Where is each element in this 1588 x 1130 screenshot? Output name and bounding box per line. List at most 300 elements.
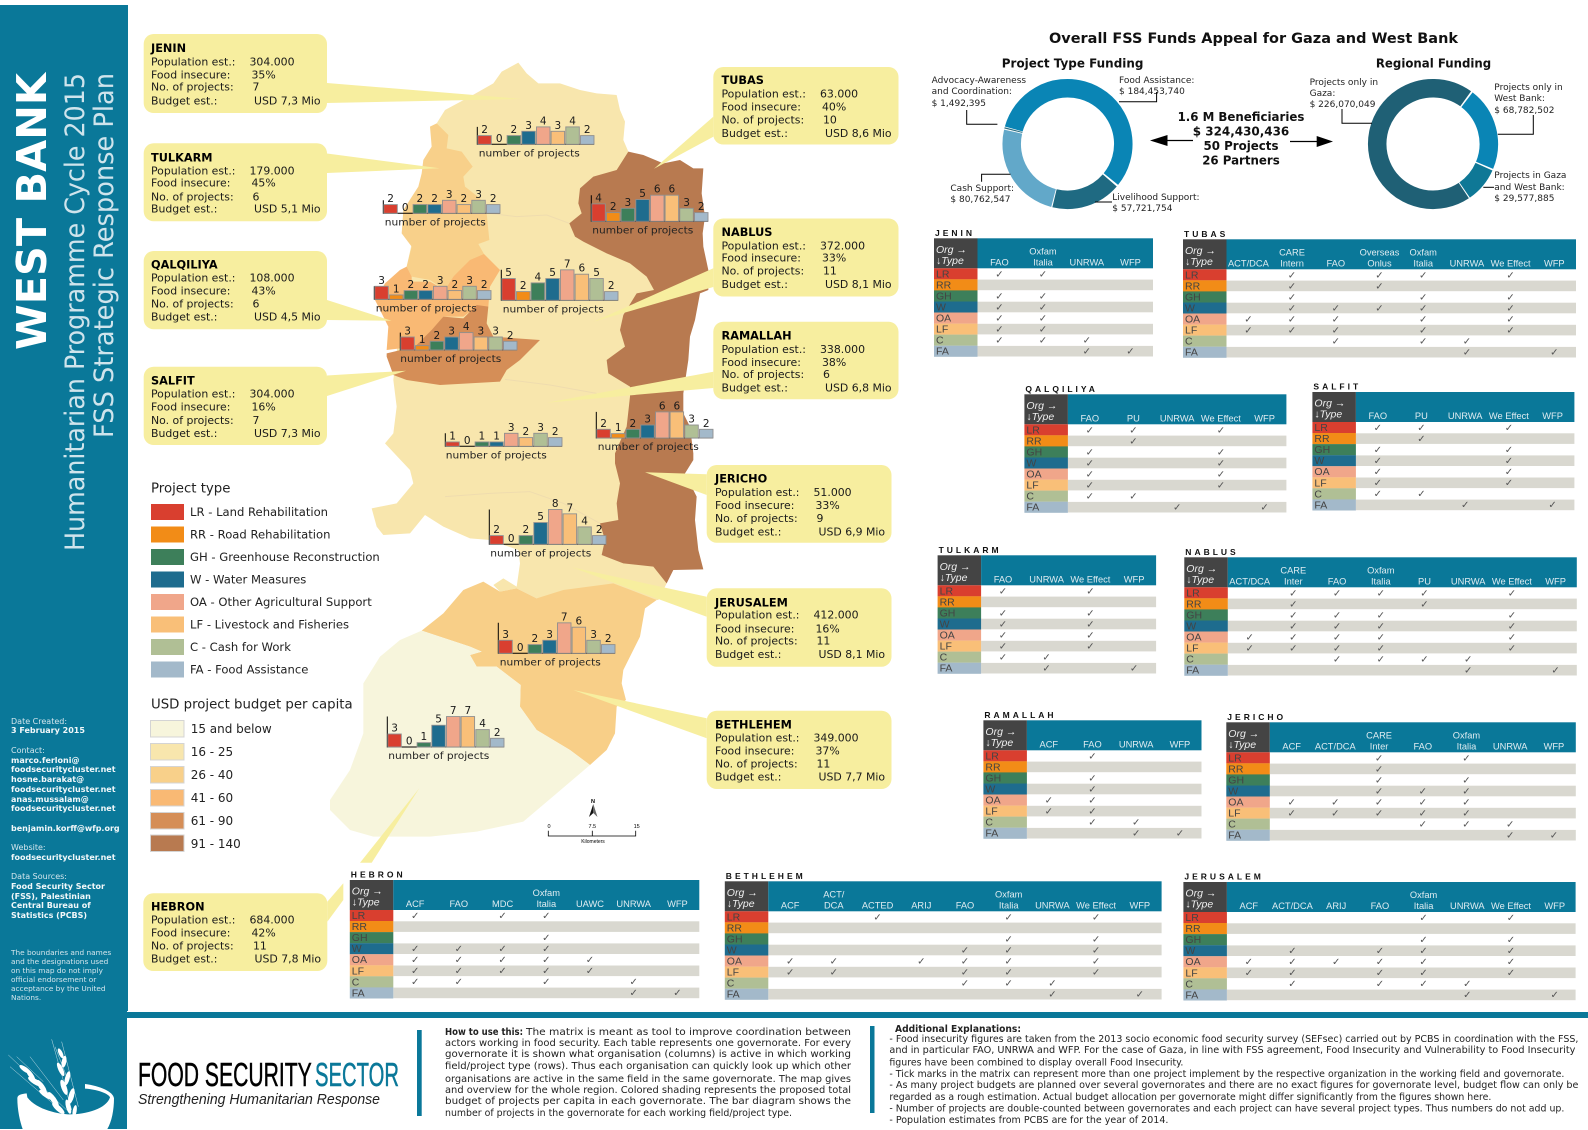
matrix table: Hebron: ACF xyxy=(406,899,425,909)
bar chart: Ramallah: number of projects xyxy=(446,450,547,461)
matrix table: Jenin: Org → xyxy=(936,244,967,256)
matrix table: Salfit: W xyxy=(1314,455,1324,467)
text block: how to use this: field/project type (rows). Thus each organisation can quickly look up which other xyxy=(445,1061,852,1072)
matrix table: Jericho: OA xyxy=(1228,796,1243,808)
matrix table: Salfit: LR xyxy=(1314,422,1328,434)
region: Tulkarm xyxy=(402,123,489,290)
matrix table: Bethlehem: GH xyxy=(727,933,743,945)
matrix table: Bethlehem: OA xyxy=(727,955,742,967)
matrix table: Bethlehem: Oxfam xyxy=(995,889,1023,899)
bar chart: Tulkarm: 20223232 xyxy=(387,189,497,214)
text block: additional explanations: regarded as a rough estimation. Actual budget allocation per governorate might differ significantly from the figures shown here. xyxy=(889,1092,1491,1103)
callout: Hebron: HEBRON xyxy=(151,900,205,913)
matrix table: Tulkarm: C xyxy=(940,652,948,664)
labels: project type funding: $ 80,762,547 xyxy=(950,195,1011,205)
matrix table: Jenin: FAO xyxy=(990,257,1009,267)
callout: Bethlehem xyxy=(573,690,892,789)
center statistics: 1.6 M Beneficiaries xyxy=(1178,110,1304,124)
bar chart: Bethlehem: 30237632 xyxy=(502,611,612,654)
matrix table: Tubas: ↓Type xyxy=(1185,256,1213,268)
legend heading: Project type xyxy=(151,482,230,496)
matrix table: Tubas: We Effect xyxy=(1491,258,1531,268)
region: Hebron xyxy=(330,631,590,837)
matrix table: Jericho: LF xyxy=(1228,808,1241,820)
matrix table: Bethlehem: FAO xyxy=(956,900,974,910)
matrix table: Nablus: ACT/DCA xyxy=(1229,576,1271,586)
matrix table: Tubas: ✓✓✓✓ xyxy=(1288,270,1515,281)
callout: Jericho: Food insecure: xyxy=(715,499,794,512)
matrix table: Jericho: RR xyxy=(1228,763,1244,775)
callout: Qalqiliya: No. of projects: xyxy=(151,297,234,310)
matrix table: Jericho: UNRWA xyxy=(1493,741,1528,751)
matrix table: Bethlehem: LF xyxy=(727,967,739,979)
matrix table: Bethlehem: We Effect xyxy=(1076,900,1116,910)
matrix table: Jericho: Inter xyxy=(1370,741,1388,751)
callout: Jerusalem: 16% xyxy=(816,622,840,635)
matrix table: Tubas: ✓✓ xyxy=(1463,347,1558,358)
text block: how to use this: The matrix is meant as tool to improve coordination between xyxy=(525,1027,851,1038)
matrix table: Tubas: ✓✓ xyxy=(1288,281,1384,292)
matrix table: Jericho: ✓✓✓ xyxy=(1375,786,1471,797)
matrix table: Bethlehem: ✓✓✓ xyxy=(961,978,1057,989)
legend: budget per capita: 91 - 140 xyxy=(191,837,241,851)
callout: Bethlehem: Population est.: xyxy=(715,731,799,744)
matrix table: Ramallah: ACF xyxy=(1039,739,1058,749)
matrix table: Tulkarm: ✓✓ xyxy=(999,608,1095,619)
matrix table: Jerusalem: FAO xyxy=(1371,901,1389,911)
matrix table: Jerusalem: ACT/DCA xyxy=(1272,901,1314,911)
matrix table: Tubas: ✓✓✓ xyxy=(1288,292,1515,303)
matrix table: Hebron: Org → xyxy=(352,886,383,898)
matrix table: Tulkarm: GH xyxy=(940,607,955,619)
sidebar credits text: anas.mussalam@ xyxy=(11,795,89,804)
heading: project type funding: Project Type Funding xyxy=(1002,56,1143,70)
matrix table: Ramallah: WFP xyxy=(1170,739,1190,749)
matrix table: Tubas: Intern xyxy=(1280,258,1304,268)
callout: Jenin: 7 xyxy=(252,80,259,93)
callout: Nablus: USD 8,1 Mio xyxy=(825,278,892,291)
legend heading: USD project budget per capita xyxy=(151,698,353,712)
matrix table: Qalqiliya: GH xyxy=(1026,446,1042,458)
main title: West Bank: WEST BANK xyxy=(8,71,56,350)
callout: Ramallah: USD 6,8 Mio xyxy=(825,381,892,394)
matrix table: Tubas: CARE xyxy=(1279,247,1305,257)
text block: additional explanations: Additional Explanations: xyxy=(895,1024,1021,1035)
matrix table: Jenin: ✓✓ xyxy=(995,313,1047,324)
matrix table: Nablus: W xyxy=(1186,620,1196,632)
matrix table: Nablus: Oxfam xyxy=(1367,565,1395,575)
matrix table: Jericho: ✓✓✓✓✓ xyxy=(1288,797,1471,808)
callout: Salfit: SALFIT xyxy=(151,374,195,387)
matrix table: Jenin: Oxfam xyxy=(1029,246,1057,256)
callout: Tubas xyxy=(654,67,898,169)
matrix table: Jerusalem: WFP xyxy=(1544,901,1565,911)
matrix table: Hebron: HEBRON xyxy=(351,870,406,880)
matrix table: Hebron: WFP xyxy=(667,899,688,909)
callout: Tulkarm: Food insecure: xyxy=(151,176,230,189)
callout: Ramallah: 338.000 xyxy=(820,343,865,356)
labels: project type funding: Food Assistance: xyxy=(1119,76,1194,86)
matrix table: Salfit: SALFIT xyxy=(1313,382,1361,392)
matrix table: Bethlehem: BETHLEHEM xyxy=(726,871,806,881)
matrix table: Tubas: LF xyxy=(1185,325,1197,337)
bar chart: Qalqiliya: number of projects xyxy=(376,303,477,314)
matrix table: Hebron: W xyxy=(352,943,362,955)
bar chart: Salfit: number of projects xyxy=(400,354,501,365)
labels: regional funding: $ 226,070,049 xyxy=(1310,100,1376,110)
callout: Jerusalem: Population est.: xyxy=(715,608,799,621)
callout: Nablus: Food insecure: xyxy=(722,252,801,265)
matrix table: Jericho: WFP xyxy=(1544,741,1564,751)
callout: Tulkarm: TULKARM xyxy=(151,151,213,164)
matrix table: Qalqiliya: ↓Type xyxy=(1026,411,1054,423)
matrix table: Ramallah: LR xyxy=(985,750,999,762)
labels: project type funding xyxy=(932,76,1200,214)
matrix table: Jerusalem: JERUSALEM xyxy=(1184,872,1264,882)
matrix table: Salfit: Org → xyxy=(1314,398,1345,410)
matrix table: Nablus: ↓Type xyxy=(1186,574,1214,586)
matrix table: Bethlehem: ✓✓✓ xyxy=(873,912,1100,923)
matrix table: Salfit xyxy=(1312,382,1574,511)
callout: Nablus: 372.000 xyxy=(820,239,865,252)
callout: Nablus xyxy=(593,218,898,322)
legend: project type: C - Cash for Work xyxy=(190,640,291,654)
matrix table: Tulkarm: ↓Type xyxy=(940,572,968,584)
labels: regional funding: and West Bank: xyxy=(1494,183,1565,193)
matrix table: Jerusalem: ✓✓✓✓✓ xyxy=(1245,968,1515,979)
matrix table: Qalqiliya: FA xyxy=(1026,502,1039,514)
callout: Tubas: TUBAS xyxy=(722,74,764,87)
callout: Salfit: 16% xyxy=(252,401,276,414)
bar chart: Qalqiliya: 31223232 xyxy=(378,275,488,295)
matrix table: Bethlehem: Italia xyxy=(999,900,1019,910)
legend: project type xyxy=(151,482,380,678)
sidebar credits text: 3 February 2015 xyxy=(11,726,85,735)
matrix table: Ramallah: ✓✓ xyxy=(1088,817,1140,828)
matrix table: Jericho: Oxfam xyxy=(1453,730,1480,740)
matrix table: Ramallah: ✓✓ xyxy=(1045,795,1097,806)
matrix table: Jericho: ✓✓ xyxy=(1375,753,1471,764)
matrix table: Ramallah: UNRWA xyxy=(1119,739,1154,749)
region: Bethlehem xyxy=(422,582,657,765)
matrix table: Jenin: LR xyxy=(936,268,950,280)
matrix table: Nablus: PU xyxy=(1418,576,1431,586)
callout: Jericho: No. of projects: xyxy=(715,512,798,525)
subtitle: programme cycle: Humanitarian Programme Cycle 2015 xyxy=(60,73,91,551)
matrix table: Ramallah: LF xyxy=(985,806,998,818)
matrix table: Ramallah: ✓✓ xyxy=(1045,806,1097,817)
bar chart: Jenin xyxy=(477,115,594,159)
matrix table: Jerusalem: ✓✓ xyxy=(1419,935,1515,946)
matrix table: Tubas: UNRWA xyxy=(1450,258,1485,268)
callout: Bethlehem: No. of projects: xyxy=(715,757,798,770)
matrix table: Tulkarm: ✓✓ xyxy=(999,641,1095,652)
text block: additional explanations: figures have been combined to display overall Food Insecurity. xyxy=(889,1058,1183,1068)
center statistics: 26 Partners xyxy=(1202,154,1280,168)
bar chart: Jenin: number of projects xyxy=(479,148,580,159)
legend: budget per capita: 26 - 40 xyxy=(191,768,233,782)
legend: project type: LF - Livestock and Fisheries xyxy=(190,618,349,632)
matrix table: Nablus: WFP xyxy=(1545,576,1566,586)
matrix table: Nablus: ✓✓✓✓ xyxy=(1289,621,1516,632)
matrix table: Tulkarm: FA xyxy=(940,663,952,675)
matrix table: Tubas: ✓✓✓✓✓ xyxy=(1244,314,1515,325)
text block: additional explanations: - Population estimates from PCBS are for the year of 2014. xyxy=(889,1115,1168,1126)
labels: regional funding: Gaza: xyxy=(1310,89,1335,99)
matrix table: Bethlehem: ACTED xyxy=(862,900,894,910)
callout: Qalqiliya: Population est.: xyxy=(151,271,235,284)
callout: Tubas: Population est.: xyxy=(722,87,806,100)
matrix table: Hebron: UAWC xyxy=(576,899,604,909)
matrix table: Ramallah: RR xyxy=(985,761,1001,773)
matrix table: Nablus: ✓✓✓✓✓ xyxy=(1246,643,1516,654)
matrix table: Qalqiliya: Org → xyxy=(1026,400,1057,412)
matrix table: Bethlehem: FA xyxy=(727,989,740,1001)
matrix table: Ramallah: OA xyxy=(985,794,1001,806)
callout: Salfit: 304.000 xyxy=(250,387,295,400)
matrix table: Hebron: Italia xyxy=(536,899,557,909)
center statistics: 50 Projects xyxy=(1204,139,1278,153)
matrix table: Bethlehem: Org → xyxy=(727,887,758,899)
sidebar credits text: foodsecuritycluster.net xyxy=(11,765,116,774)
heading: overall funds appeal: Overall FSS Funds Appeal for Gaza and West Bank xyxy=(1049,31,1458,47)
matrix table: Ramallah: RAMALLAH xyxy=(984,710,1057,720)
matrix table: Tulkarm: LR xyxy=(940,585,953,597)
matrix table: Jenin: ✓✓ xyxy=(1083,346,1135,357)
matrix table: Tubas: TUBAS xyxy=(1184,229,1228,239)
callout: Ramallah: No. of projects: xyxy=(722,368,804,381)
bar chart: Tubas xyxy=(591,184,708,236)
matrix table: Salfit: C xyxy=(1314,488,1322,500)
matrix table: Nablus: Org → xyxy=(1186,563,1217,575)
matrix table: Nablus: ✓✓ xyxy=(1289,599,1429,610)
callout: Jericho: 51.000 xyxy=(814,486,852,499)
callout: Nablus: No. of projects: xyxy=(722,265,804,278)
callout: Jenin: USD 7,3 Mio xyxy=(254,94,321,107)
bar chart: Hebron: number of projects xyxy=(388,751,489,762)
callout: Jericho xyxy=(645,465,892,543)
matrix table: Qalqiliya: ✓ xyxy=(1129,436,1138,447)
matrix table: Jerusalem: FA xyxy=(1185,989,1198,1001)
text block: additional explanations: - As many project budgets are planned over several governorates and there are no exact figures for governorate level, budget flow can only be xyxy=(889,1080,1578,1091)
labels: project type funding: Advocacy-Awareness xyxy=(932,76,1026,86)
matrix table: Jerusalem xyxy=(1183,872,1576,1001)
matrix table: Tubas: FAO xyxy=(1326,258,1345,268)
callout: Tulkarm: 45% xyxy=(252,176,276,189)
donut chart: regional funding xyxy=(1355,66,1511,222)
matrix table: Tubas xyxy=(1183,229,1576,359)
callout: Hebron: No. of projects: xyxy=(151,939,234,952)
callout: Ramallah: 6 xyxy=(823,368,830,381)
matrix table: Hebron xyxy=(350,870,699,999)
matrix table: Nablus: ✓✓ xyxy=(1464,665,1560,676)
matrix table: Qalqiliya: QALQILIYA xyxy=(1025,384,1098,394)
matrix table: Tubas: RR xyxy=(1185,280,1201,292)
callout: Jenin: No. of projects: xyxy=(151,80,234,93)
matrix table: Jerusalem: OA xyxy=(1185,956,1201,968)
matrix table: Salfit: ✓✓✓ xyxy=(1374,423,1513,434)
matrix table: Tulkarm: TULKARM xyxy=(939,545,1002,555)
matrix table: Jericho: FAO xyxy=(1413,741,1432,751)
matrix table: Bethlehem: ARIJ xyxy=(911,900,931,910)
matrix table: Nablus: ✓✓✓✓✓ xyxy=(1289,588,1516,599)
matrix table: Qalqiliya: OA xyxy=(1026,468,1042,480)
matrix table: Bethlehem: W xyxy=(727,944,737,956)
matrix table: Jerusalem: Italia xyxy=(1414,901,1434,911)
matrix table: Jericho: GH xyxy=(1228,774,1244,786)
matrix table: Jerusalem: ✓✓✓✓✓✓ xyxy=(1245,957,1515,968)
matrix table: Ramallah: ✓ xyxy=(1088,784,1097,795)
matrix table: Tulkarm: LF xyxy=(940,641,952,653)
matrix table: Jerusalem: Org → xyxy=(1185,888,1216,900)
matrix table: Tubas: ✓✓✓ xyxy=(1332,336,1471,347)
matrix table: Tubas: OA xyxy=(1185,314,1200,326)
matrix table: Nablus: Italia xyxy=(1371,576,1391,586)
text block: how to use this: How to use this: xyxy=(445,1027,523,1038)
callout: Hebron: 42% xyxy=(252,926,276,939)
callout: Jerusalem: Food insecure: xyxy=(715,622,794,635)
callout: Jenin: Food insecure: xyxy=(151,68,230,81)
matrix table: Jerusalem: GH xyxy=(1185,934,1201,946)
callout: Nablus: NABLUS xyxy=(722,226,772,239)
matrix table: Ramallah: FAO xyxy=(1083,739,1102,749)
callout: Tubas: 10 xyxy=(823,114,837,127)
matrix table: Hebron: ✓✓✓✓ xyxy=(411,977,638,988)
legend: project type: FA - Food Assistance xyxy=(190,662,308,676)
matrix table: Nablus: ✓✓✓✓ xyxy=(1333,654,1472,665)
bar chart: Salfit xyxy=(400,321,517,365)
matrix table: Qalqiliya: RR xyxy=(1026,435,1042,447)
matrix table: Jericho: W xyxy=(1228,785,1238,797)
callout: Bethlehem: Budget est.: xyxy=(715,770,781,783)
matrix table: Jericho: ✓✓✓ xyxy=(1419,819,1514,830)
bar chart: Tubas: number of projects xyxy=(592,225,693,236)
callout: Hebron: 684.000 xyxy=(250,913,295,926)
bar chart: Nablus xyxy=(501,258,618,315)
north arrow and scale bar: 15 xyxy=(634,824,640,830)
text block: how to use this: organisations are active in the same field in the same governorate. The map gives xyxy=(445,1074,851,1085)
matrix table: Hebron: OA xyxy=(352,954,367,966)
text block: how to use this: and overview for the whole region. Colored shading represents the proposed total xyxy=(445,1085,851,1096)
callout: Jericho: Budget est.: xyxy=(715,525,781,538)
matrix table: Jerusalem: ✓✓ xyxy=(1463,990,1559,1001)
callout: Bethlehem: 11 xyxy=(816,757,830,770)
matrix table: Jerusalem: LF xyxy=(1185,967,1198,979)
north arrow and scale bar: 7.5 xyxy=(588,824,596,830)
matrix table: Salfit: FAO xyxy=(1368,411,1387,421)
labels: project type funding: $ 57,721,754 xyxy=(1112,204,1173,214)
bar chart: Jericho xyxy=(596,400,713,453)
matrix table: Tulkarm: ✓✓ xyxy=(999,652,1051,663)
callout: Jericho: 33% xyxy=(816,499,840,512)
callout: Qalqiliya: 6 xyxy=(252,297,260,310)
matrix table: Tulkarm: ✓✓ xyxy=(1042,663,1138,674)
matrix table: Jerusalem: ✓✓✓✓ xyxy=(1288,946,1515,957)
matrix table: Hebron: FAO xyxy=(449,899,468,909)
matrix table: Hebron: GH xyxy=(352,932,368,944)
matrix table: Tulkarm: FAO xyxy=(994,574,1012,584)
bar chart: Bethlehem xyxy=(498,611,615,668)
matrix table: Jerusalem: ↓Type xyxy=(1185,898,1213,910)
north arrow and scale bar: N xyxy=(591,799,595,805)
matrix table: Tulkarm: ✓✓ xyxy=(999,619,1095,630)
matrix table: Salfit: ✓✓ xyxy=(1374,478,1513,489)
matrix table: Nablus: Inter xyxy=(1284,576,1303,586)
callout: Ramallah: Population est.: xyxy=(722,343,806,356)
callout: Qalqiliya xyxy=(144,251,392,329)
matrix table: Qalqiliya: LR xyxy=(1026,424,1040,436)
callout: Ramallah: RAMALLAH xyxy=(722,330,792,343)
callout: Hebron: Budget est.: xyxy=(151,952,217,965)
callout: Salfit: Population est.: xyxy=(151,387,235,400)
sidebar credits text: on this map do not imply xyxy=(11,966,104,975)
matrix table: Ramallah: ✓ xyxy=(1088,751,1097,762)
bar chart: Tulkarm: number of projects xyxy=(385,217,486,228)
matrix table: Jericho: Italia xyxy=(1457,741,1477,751)
matrix table: Jericho: LR xyxy=(1228,752,1242,764)
matrix table: Jenin: ↓Type xyxy=(936,255,964,267)
matrix table: Qalqiliya: W xyxy=(1026,457,1036,469)
matrix table: Bethlehem: DCA xyxy=(824,900,844,910)
matrix table: Jenin: ✓✓ xyxy=(995,324,1047,335)
bar chart: Jericho: number of projects xyxy=(598,442,699,453)
bar chart: Jerusalem: number of projects xyxy=(490,548,591,559)
matrix table: Tulkarm: We Effect xyxy=(1070,574,1111,584)
text block: additional explanations: and in particular FAO, UNRWA and WFP. For the case of Gaza, in line with FSS agreement, Food Insecurity and Vulnerability to Food Insecurity xyxy=(889,1045,1575,1056)
legend: budget per capita: 15 and below xyxy=(191,722,272,736)
callout: Jerusalem: 11 xyxy=(816,634,830,647)
matrix table: Jerusalem: C xyxy=(1185,978,1193,990)
callout: Ramallah xyxy=(547,322,898,403)
bar chart: Qalqiliya xyxy=(374,275,491,314)
matrix table: Nablus: GH xyxy=(1186,609,1202,621)
callout: Tubas: No. of projects: xyxy=(722,114,804,127)
north arrow and scale bar xyxy=(547,799,640,845)
matrix table: Nablus: NABLUS xyxy=(1185,547,1239,557)
callout: Tulkarm: USD 5,1 Mio xyxy=(254,202,321,215)
sidebar credits text: and the designations used xyxy=(11,957,108,966)
bar chart: Hebron: 30157742 xyxy=(391,705,501,748)
matrix table: Nablus: C xyxy=(1186,654,1194,666)
matrix table: Jericho: ✓✓ xyxy=(1375,775,1471,786)
region: Tubas and Jericho xyxy=(569,152,708,583)
matrix table: Hebron: FA xyxy=(352,987,365,999)
legend: budget per capita: 61 - 90 xyxy=(191,814,233,828)
text block: how to use this: number of projects in the governorate for each working field/project type. xyxy=(445,1108,792,1119)
matrix table: Salfit: WFP xyxy=(1542,411,1563,421)
matrix table: Bethlehem: LR xyxy=(727,911,741,923)
matrix table: Tubas: W xyxy=(1185,302,1195,314)
region: Jenin, Nablus, Ramallah, Jerusalem xyxy=(372,63,667,600)
region: Salfit xyxy=(387,305,540,385)
matrix table: Jenin: FA xyxy=(936,346,949,358)
callout: Jenin: 35% xyxy=(252,68,276,81)
labels: project type funding: Livelihood Support: xyxy=(1112,193,1200,203)
bottom divider bar xyxy=(127,1012,1588,1018)
region: Qalqiliya xyxy=(375,254,500,350)
callout: Tubas: 63.000 xyxy=(820,87,858,100)
matrix table: Salfit: ✓ xyxy=(1417,434,1426,445)
matrix table: Jerusalem: LR xyxy=(1185,912,1199,924)
labels: project type funding: and Coordination: xyxy=(932,87,1012,97)
matrix table: Tulkarm: ✓✓ xyxy=(999,630,1095,641)
matrix table: Qalqiliya: We Effect xyxy=(1201,413,1241,423)
sidebar credits text: Central Bureau of xyxy=(11,901,91,910)
callout: Ramallah: Food insecure: xyxy=(722,356,801,369)
bar chart: Jenin: 20234342 xyxy=(481,115,591,145)
matrix table: Jericho: ✓✓ xyxy=(1506,830,1558,841)
callout: Jenin: Budget est.: xyxy=(151,94,217,107)
